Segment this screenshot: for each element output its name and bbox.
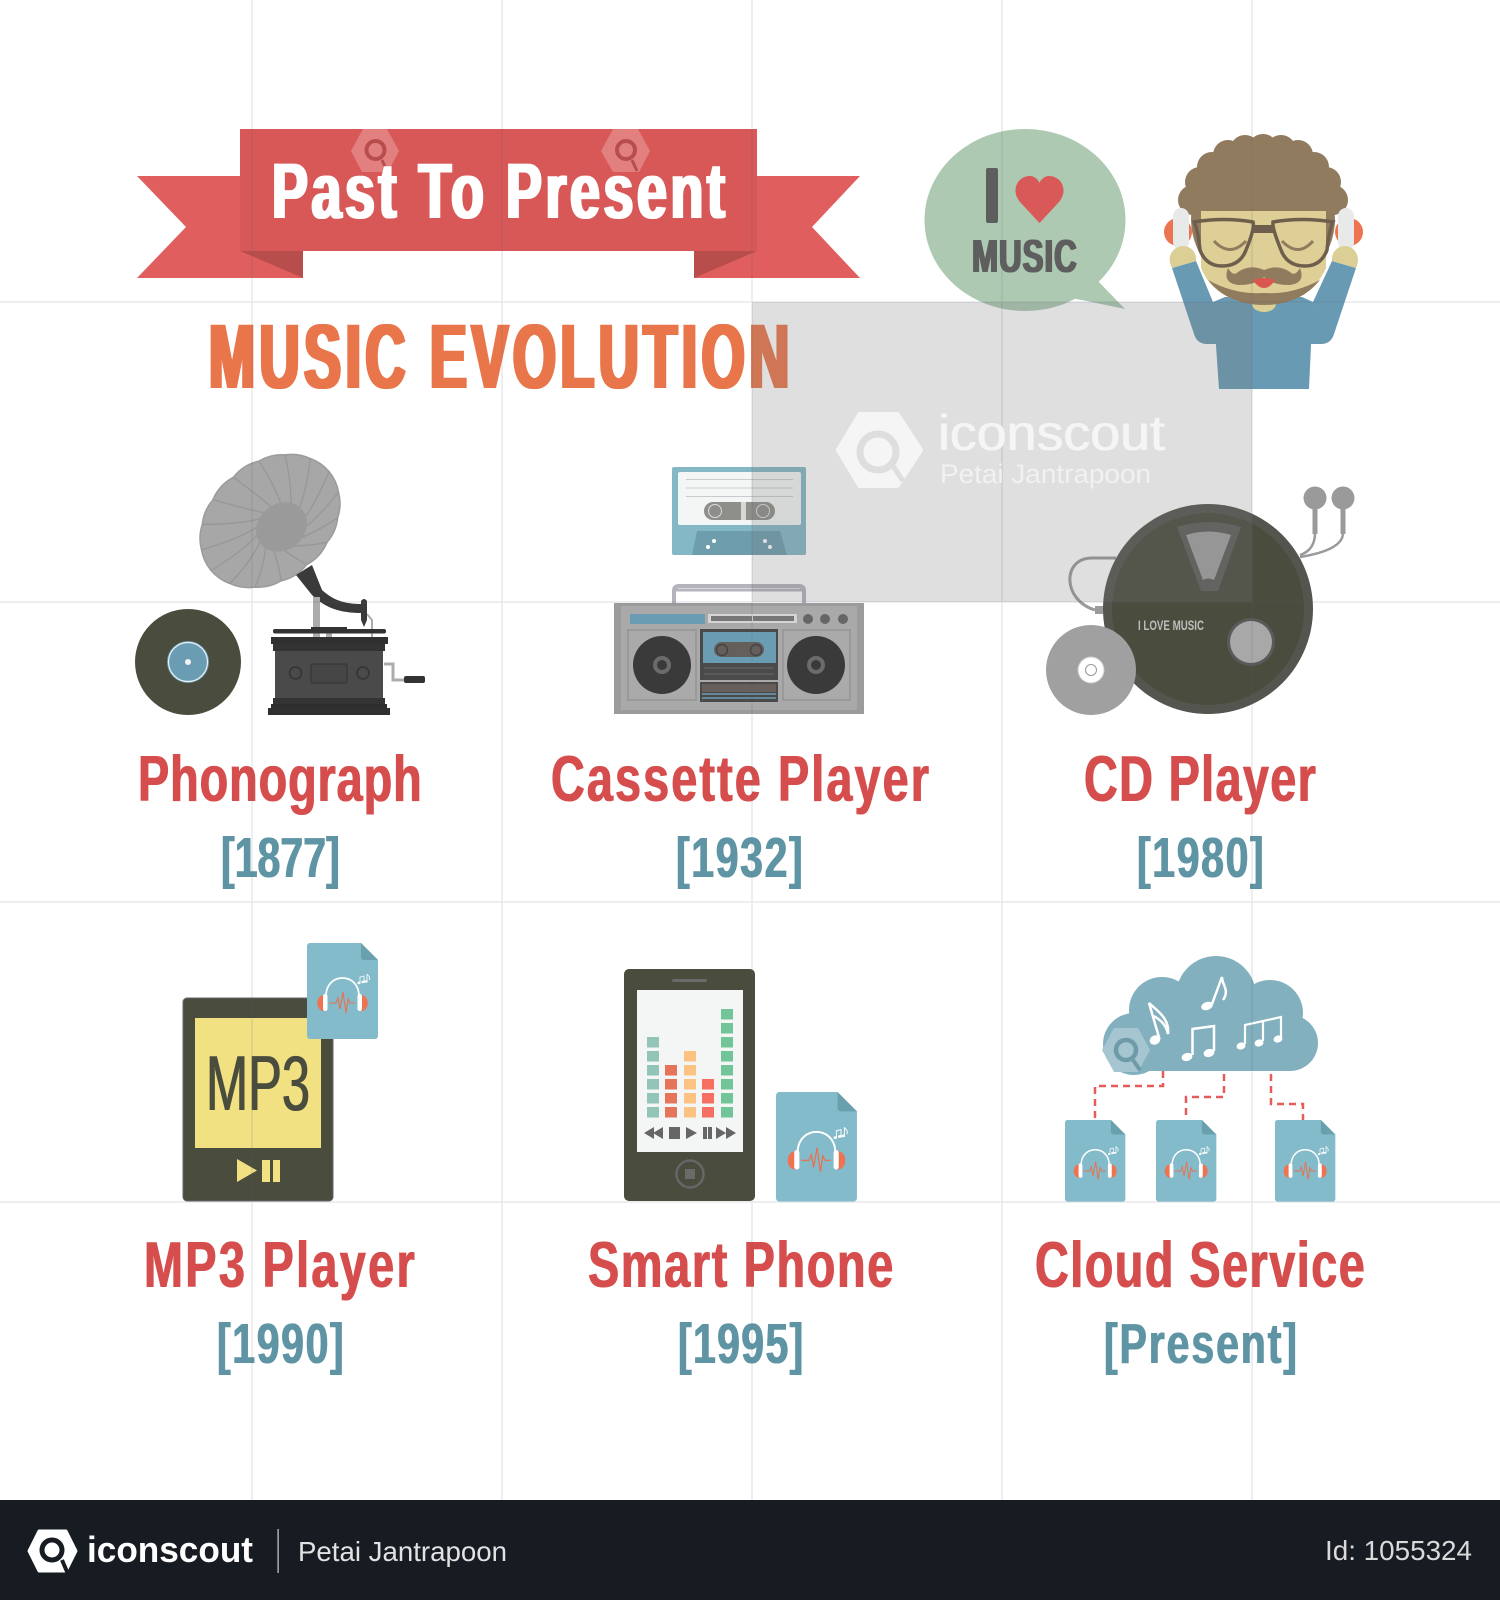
equalizer bars — [647, 1037, 659, 1118]
label: cloud service — [1035, 1230, 1365, 1376]
label: phonograph — [138, 744, 422, 890]
watermark badge — [601, 129, 650, 172]
earbuds — [1300, 533, 1343, 557]
speakers — [628, 630, 696, 700]
mp3 screen text: MP3 — [206, 1039, 310, 1127]
heart — [1015, 176, 1064, 223]
label: cd player: [1980] — [1137, 825, 1264, 890]
icon: phonograph — [174, 427, 425, 715]
character with headphones — [1164, 134, 1363, 389]
play pause — [237, 1159, 280, 1182]
speech bubble — [924, 129, 1126, 311]
icon: cloud service — [1065, 956, 1335, 1202]
compact disc — [1046, 625, 1136, 715]
horn neck — [296, 565, 362, 613]
watermark logo — [839, 405, 1165, 489]
audio file — [307, 943, 378, 1039]
watermark hexagon — [839, 415, 920, 485]
bubble text: MUSIC — [972, 231, 1077, 283]
closed eyes — [1214, 241, 1313, 250]
home button — [676, 1160, 704, 1188]
label: mp3 player: MP3 Player — [144, 1230, 415, 1302]
left cord — [1070, 558, 1116, 610]
label: phonograph: [1877] — [221, 825, 340, 890]
headphones — [1173, 208, 1189, 250]
tuner strip — [630, 614, 705, 624]
play button — [1227, 618, 1275, 666]
watermark brand: iconscout — [938, 405, 1165, 461]
footer logo — [29, 1531, 76, 1574]
footer author: Petai Jantrapoon — [298, 1536, 507, 1567]
label: cloud service: Cloud Service — [1035, 1230, 1365, 1302]
icon: cassette tape — [672, 467, 806, 555]
banner title: Past To Present — [272, 148, 725, 236]
horn — [174, 427, 366, 615]
crank — [384, 664, 404, 680]
connectors — [1095, 1071, 1303, 1120]
label: phonograph: Phonograph — [138, 744, 422, 816]
label: mp3 player — [144, 1230, 415, 1376]
watermark badge on cloud — [1102, 1028, 1150, 1072]
cloud — [1103, 956, 1318, 1075]
label: cassette player: [1932] — [676, 825, 803, 890]
footer brand: iconscout — [87, 1529, 253, 1570]
icon: boombox — [614, 586, 864, 714]
label: smart phone — [588, 1230, 893, 1376]
turntable — [311, 627, 347, 630]
bubble letter I — [986, 168, 998, 223]
footer bar — [0, 1500, 1500, 1600]
music notes — [1148, 977, 1283, 1062]
glasses — [1194, 220, 1333, 266]
icon: cd player — [1046, 486, 1354, 715]
label: smart phone: Smart Phone — [588, 1230, 893, 1302]
label: cassette player — [551, 744, 929, 890]
hands — [1170, 246, 1196, 268]
ribbon right tail — [694, 176, 860, 278]
face — [1201, 211, 1326, 304]
ribbon banner — [137, 129, 860, 278]
watermark author: Petai Jantrapoon — [940, 459, 1151, 489]
player body — [1103, 504, 1313, 714]
player label: I LOVE MUSIC — [1138, 617, 1204, 633]
footer id: Id: 1055324 — [1325, 1535, 1472, 1566]
icon: vinyl record — [135, 609, 241, 715]
audio file — [776, 1092, 857, 1201]
cabinet — [275, 651, 383, 698]
media controls — [644, 1127, 736, 1139]
audio files — [1065, 1120, 1335, 1202]
label: mp3 player: [1990] — [217, 1311, 344, 1376]
icon: mp3 player — [183, 943, 378, 1201]
label: smart phone: [1995] — [678, 1311, 803, 1376]
handle — [674, 586, 804, 604]
ribbon left tail — [137, 176, 303, 278]
label: cloud service: [Present] — [1104, 1311, 1297, 1376]
label: cassette player: Cassette Player — [551, 744, 929, 816]
watermark overlay panel — [752, 302, 1252, 602]
icon: smartphone — [624, 969, 857, 1201]
watermark badge — [351, 129, 399, 172]
tape deck — [700, 629, 778, 680]
hair — [1178, 134, 1348, 291]
mustache — [1226, 267, 1302, 285]
display — [1177, 522, 1241, 591]
label: cd player: CD Player — [1084, 744, 1316, 816]
label: cd player — [1084, 744, 1316, 890]
main heading: MUSIC EVOLUTION — [209, 306, 789, 409]
